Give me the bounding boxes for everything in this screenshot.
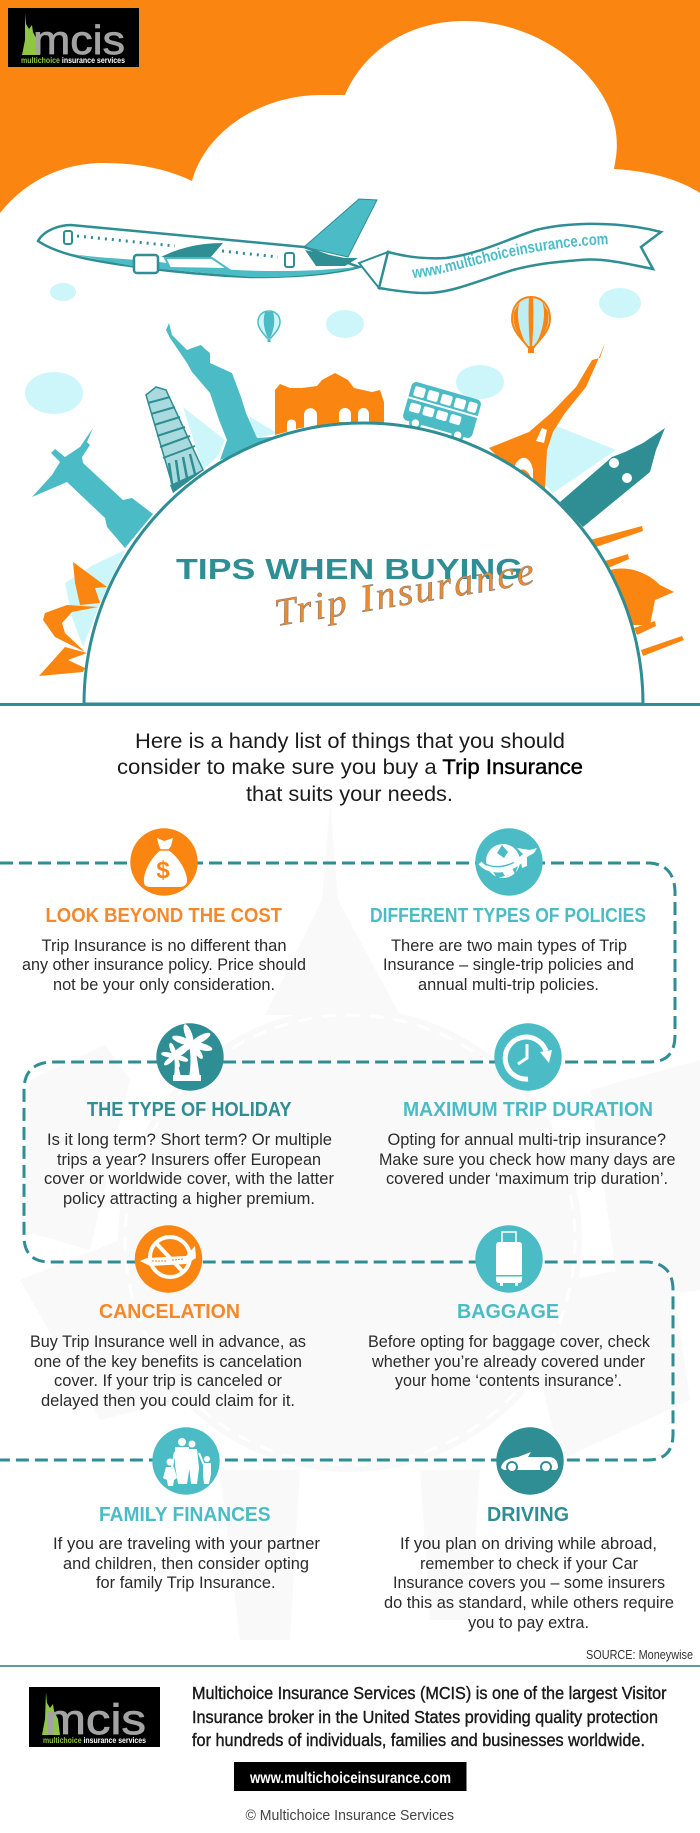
body text: cover or worldwide cover, with the latter bbox=[44, 1169, 334, 1188]
landmark: Christ the Redeemer bbox=[32, 428, 153, 548]
title: trip insurance script: Trip Insurance bbox=[271, 550, 537, 635]
body text: policy attracting a higher premium. bbox=[63, 1189, 315, 1208]
body text: any other insurance policy. Price should bbox=[22, 955, 306, 974]
landmark: Sydney Opera House bbox=[39, 562, 107, 676]
icon: palm trees bbox=[156, 1023, 224, 1091]
panel: the type of holiday bbox=[44, 1023, 334, 1208]
logo: top MCIS: mcis bbox=[33, 17, 125, 63]
body text: Opting for annual multi-trip insurance? bbox=[388, 1130, 666, 1149]
body text: delayed then you could claim for it. bbox=[41, 1391, 295, 1410]
logo: top MCIS: multichoice insurance services bbox=[21, 56, 125, 65]
body text: There are two main types of Trip bbox=[391, 936, 627, 955]
icon: money bag bbox=[130, 828, 198, 896]
body text bbox=[384, 1534, 674, 1632]
title: tips when buying: TIPS WHEN BUYING bbox=[176, 554, 523, 586]
intro text bbox=[117, 730, 583, 806]
body text: If you are traveling with your partner bbox=[53, 1534, 320, 1553]
heading: FAMILY FINANCES bbox=[99, 1504, 270, 1526]
heading: THE TYPE OF HOLIDAY bbox=[87, 1099, 292, 1121]
body text: you to pay extra. bbox=[468, 1613, 589, 1632]
header: orange sky bbox=[0, 0, 700, 260]
footer description: for hundreds of individuals, families and businesses worldwide. bbox=[192, 1730, 645, 1750]
banner: website bbox=[357, 222, 664, 294]
body text bbox=[368, 1332, 650, 1390]
footer description bbox=[192, 1683, 667, 1750]
body text: Buy Trip Insurance well in advance, as bbox=[30, 1332, 306, 1351]
body text: Is it long term? Short term? Or multiple bbox=[47, 1130, 332, 1149]
landmark: Statue of Liberty bbox=[166, 323, 272, 460]
body text bbox=[22, 936, 306, 994]
website button: www.multichoiceinsurance.com bbox=[249, 1770, 451, 1787]
icon: money bag: $ bbox=[156, 857, 170, 884]
panel: maximum trip duration bbox=[379, 1023, 676, 1188]
heading: MAXIMUM TRIP DURATION bbox=[403, 1099, 653, 1121]
footer divider bbox=[0, 1665, 700, 1667]
body text: If you plan on driving while abroad, bbox=[400, 1534, 657, 1553]
landmark: Leaning Tower of Pisa bbox=[146, 387, 203, 493]
icon: clock with arrow bbox=[494, 1023, 562, 1091]
landmark: double-decker bus bbox=[401, 381, 482, 444]
pale clouds and triangles bbox=[25, 283, 641, 647]
body text: do this as standard, while others require bbox=[384, 1593, 674, 1612]
panel: different types of policies bbox=[370, 828, 646, 994]
dashed route line bbox=[0, 863, 675, 1460]
website button bbox=[234, 1762, 466, 1791]
heading: LOOK BEYOND THE COST bbox=[46, 905, 282, 927]
icon: globe and plane bbox=[475, 828, 543, 896]
landmark: Alcala gate bbox=[275, 373, 384, 435]
icon: small balloon bbox=[258, 311, 280, 342]
panel: look beyond the cost bbox=[22, 828, 306, 994]
body text: Insurance covers you – some insurers bbox=[393, 1573, 665, 1592]
banner: website: www.multichoiceinsurance.com bbox=[412, 236, 608, 278]
body text: annual multi-trip policies. bbox=[418, 975, 599, 994]
logo: footer MCIS: multichoice insurance services bbox=[43, 1736, 146, 1745]
heading: CANCELATION bbox=[99, 1301, 240, 1323]
watermark: faded world landmarks bbox=[20, 800, 700, 1640]
landmark: Eiffel Tower bbox=[489, 343, 605, 490]
body text: Trip Insurance is no different than bbox=[42, 936, 286, 955]
body text bbox=[383, 936, 634, 994]
body text: one of the key benefits is cancelation bbox=[34, 1352, 302, 1371]
landmark: Big Ben bbox=[560, 428, 665, 527]
airplane bbox=[38, 199, 377, 277]
panel: cancelation bbox=[30, 1225, 306, 1410]
intro text: consider to make sure you buy a Trip Insurance bbox=[117, 756, 583, 779]
heading: BAGGAGE bbox=[457, 1301, 559, 1323]
panel: family finances bbox=[53, 1427, 320, 1592]
body text: Insurance – single-trip policies and bbox=[383, 955, 634, 974]
logo: top MCIS bbox=[8, 8, 139, 67]
icon: convertible car bbox=[496, 1427, 564, 1495]
body text: Make sure you check how many days are bbox=[379, 1150, 676, 1169]
panel: baggage bbox=[368, 1225, 650, 1390]
heading: DRIVING bbox=[487, 1504, 569, 1526]
body text: covered under ‘maximum trip duration’. bbox=[386, 1169, 668, 1188]
heading: DIFFERENT TYPES OF POLICIES bbox=[370, 905, 646, 927]
dome: globe bbox=[84, 423, 643, 704]
copyright: © Multichoice Insurance Services bbox=[246, 1807, 454, 1824]
landmark: Taj Mahal bbox=[590, 526, 684, 656]
body text: remember to check if your Car bbox=[420, 1554, 638, 1573]
body text: cover. If your trip is canceled or bbox=[54, 1371, 282, 1390]
intro text: Here is a handy list of things that you should bbox=[135, 730, 565, 753]
body text bbox=[379, 1130, 676, 1188]
body text: Before opting for baggage cover, check bbox=[368, 1332, 650, 1351]
logo: footer MCIS: mcis bbox=[45, 1696, 146, 1744]
footer description: Insurance broker in the United States providing quality protection bbox=[192, 1707, 658, 1727]
icon: suitcase bbox=[475, 1225, 543, 1293]
icon: family bbox=[152, 1427, 220, 1495]
body text bbox=[53, 1534, 320, 1592]
body text: trips a year? Insurers offer European bbox=[57, 1150, 321, 1169]
body text: and children, then consider opting bbox=[63, 1554, 309, 1573]
header: white cloud bbox=[0, 21, 700, 720]
panel: driving bbox=[384, 1427, 674, 1632]
intro text: that suits your needs. bbox=[246, 783, 453, 806]
icon: no plane bbox=[135, 1225, 202, 1293]
footer description: Multichoice Insurance Services (MCIS) is one of the largest Visitor bbox=[192, 1683, 667, 1703]
logo: footer MCIS bbox=[29, 1687, 160, 1747]
body text: whether you’re already covered under bbox=[371, 1352, 645, 1371]
body text: not be your only consideration. bbox=[53, 975, 275, 994]
body text: for family Trip Insurance. bbox=[96, 1573, 276, 1592]
divider line bbox=[0, 703, 700, 706]
body text bbox=[44, 1130, 334, 1208]
body text: your home ‘contents insurance’. bbox=[395, 1371, 622, 1390]
icon: large balloon bbox=[512, 297, 550, 353]
body text bbox=[30, 1332, 306, 1410]
